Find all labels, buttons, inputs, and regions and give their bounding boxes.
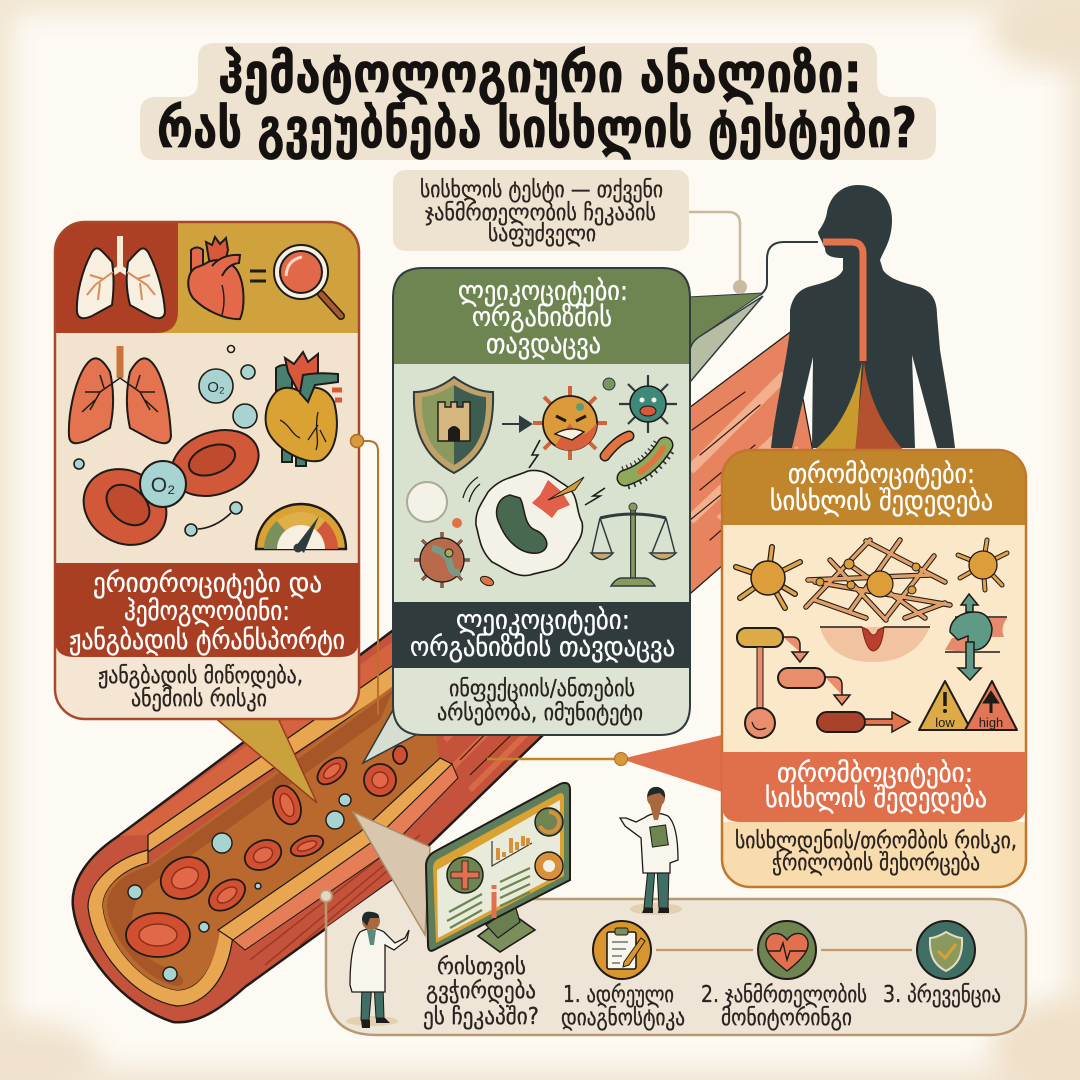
oxygen molecule bbox=[140, 461, 186, 507]
connector: tube line bbox=[760, 242, 818, 295]
panel: erythrocytes bbox=[55, 222, 364, 719]
leukocytes heading: ლეიკოციტები: bbox=[458, 276, 628, 307]
icon: heart small bbox=[188, 237, 244, 319]
connector: platelets to vessel bbox=[487, 758, 621, 760]
step labels: 2. ჯანმრთელობის bbox=[701, 982, 867, 1008]
dotted link bbox=[198, 513, 231, 529]
icon: anatomical heart bbox=[266, 352, 342, 466]
question text bbox=[423, 954, 539, 1030]
oxygen molecule: O₂ bbox=[151, 474, 175, 497]
platelets heading: სისხლის შედედება bbox=[770, 486, 993, 517]
icon: angry virus bbox=[533, 386, 607, 460]
callout tail: platelets bbox=[621, 735, 722, 792]
icon: rod bacterium bbox=[605, 436, 629, 456]
connector: note to callout bbox=[689, 212, 740, 282]
callout tail: platelets top bbox=[812, 361, 905, 452]
icon: warning triangles: low bbox=[935, 715, 955, 730]
callout tail: leukocytes upper bbox=[688, 293, 763, 382]
icon: green virus bbox=[619, 375, 677, 433]
human silhouette bbox=[771, 185, 955, 448]
icon: warning triangles bbox=[919, 681, 1017, 730]
step labels: 3. პრევენცია bbox=[883, 982, 1001, 1008]
question text: გვჭირდება bbox=[426, 978, 536, 1004]
platelets band: თრომბოციტები: bbox=[777, 758, 973, 789]
leukocytes description: ინფექციის/ანთების bbox=[449, 676, 635, 702]
icon: scales bbox=[591, 503, 676, 586]
icon: check shield bbox=[917, 921, 975, 979]
icon: equals bbox=[250, 271, 266, 281]
icon: fibrin mesh bbox=[806, 540, 950, 620]
connector dot: bottom panel bbox=[320, 890, 332, 902]
leukocytes description bbox=[437, 676, 643, 726]
arrow bbox=[502, 417, 531, 431]
leukocytes heading bbox=[458, 276, 628, 360]
step connectors bbox=[656, 949, 912, 951]
red blood cells bbox=[70, 418, 268, 560]
motion lines bbox=[463, 477, 480, 502]
connector: erythrocytes to vessel bbox=[357, 441, 378, 715]
leukocytes heading: თავდაცვა bbox=[486, 329, 601, 360]
platelets heading bbox=[770, 459, 993, 517]
flow diagram bbox=[737, 628, 910, 738]
icon: platelet left bbox=[736, 547, 800, 608]
small particles bbox=[452, 518, 495, 588]
step labels bbox=[561, 982, 1001, 1031]
connector dot: platelets bbox=[614, 752, 628, 766]
icon: magnifier bbox=[274, 245, 341, 316]
step labels: 1. ადრეული bbox=[563, 982, 674, 1008]
intro note box: სისხლის ტესტი — თქვენი bbox=[420, 177, 663, 203]
small particle bbox=[603, 378, 615, 390]
panel: platelets bbox=[722, 450, 1026, 887]
vessel: upper cut wall bbox=[120, 640, 395, 836]
icon: heart pulse bbox=[758, 921, 816, 979]
icon: flagellated bacterium bbox=[625, 445, 665, 478]
step labels: მონიტორინგი bbox=[721, 1005, 852, 1031]
platelets description: სისხლდენის/თრომბის რისკი, bbox=[735, 828, 1017, 854]
icon: warning triangles: high bbox=[979, 715, 1003, 730]
vessel: oxygen bubbles bbox=[128, 794, 351, 981]
leukocytes band bbox=[410, 605, 675, 663]
blood vessel bbox=[73, 320, 830, 1022]
icon: wound bbox=[820, 627, 930, 662]
platelets band bbox=[765, 758, 987, 814]
panel: leukocytes bbox=[393, 268, 690, 735]
erythrocytes description bbox=[98, 663, 303, 712]
question text: რისთვის bbox=[437, 954, 526, 980]
vessel: red blood cells bbox=[126, 746, 407, 957]
icon: monitor bbox=[426, 783, 570, 952]
icon: gauge bbox=[256, 504, 346, 553]
question text: ეს ჩეკაპში? bbox=[423, 1004, 539, 1030]
step labels: დიაგნოსტიკა bbox=[561, 1005, 685, 1031]
platelets band: სისხლის შედედება bbox=[765, 783, 987, 814]
vessel: lumen bbox=[103, 686, 440, 990]
silhouette: trachea bbox=[823, 242, 863, 361]
icon: shield with tower bbox=[414, 377, 493, 473]
intro note box: საფუძველი bbox=[488, 221, 596, 247]
intro note box: ჯანმრთელობის ჩეკაპის bbox=[425, 200, 656, 226]
title: ჰემატოლოგიური ანალიზი: bbox=[218, 41, 862, 105]
leukocytes band: ლეიკოციტები: bbox=[456, 605, 630, 636]
title bbox=[140, 41, 936, 160]
leukocytes heading: ორგანიზმის bbox=[472, 302, 612, 333]
erythrocytes band bbox=[55, 563, 359, 657]
erythrocytes description: ანემიის რისკი bbox=[131, 686, 267, 712]
doctor left bbox=[346, 912, 409, 1028]
erythrocytes band: ჟანგბადის ტრანსპორტი bbox=[69, 625, 345, 656]
erythrocytes description: ჟანგბადის მიწოდება, bbox=[98, 663, 303, 689]
oxygen bubbles bbox=[74, 346, 257, 536]
platelets description bbox=[735, 828, 1017, 876]
monitor: donut bbox=[535, 808, 563, 880]
monitor: data lines bbox=[447, 868, 530, 928]
icon: clipboard bbox=[593, 921, 651, 979]
erythrocytes band: ერითროციტები და bbox=[93, 568, 322, 599]
icon: platelet right bbox=[958, 540, 1007, 590]
erythrocytes band: ჰემოგლობინი: bbox=[124, 596, 290, 627]
intro note box bbox=[393, 170, 689, 251]
icon: lymphocyte bbox=[407, 482, 447, 522]
connector dot bbox=[733, 280, 747, 294]
callout tail: monitor bbox=[353, 812, 430, 935]
platelets heading: თრომბოციტები: bbox=[788, 459, 975, 490]
leukocytes band: ორგანიზმის თავდაცვა bbox=[410, 632, 675, 663]
vessel: lower cut wall bbox=[218, 758, 452, 940]
icon: macrophage bbox=[476, 470, 584, 576]
label: O2 small: O₂ bbox=[207, 379, 225, 396]
connector dot: erythrocytes bbox=[350, 434, 364, 448]
leukocytes description: არსებობა, იმუნიტეტი bbox=[437, 700, 643, 726]
icon: vessel repair bbox=[945, 594, 1007, 680]
platelets description: ჭრილობის შეხორცება bbox=[772, 850, 980, 876]
lightning bolts bbox=[529, 440, 605, 505]
panel: bottom why checkup bbox=[320, 783, 1026, 1035]
callout tail: leukocytes lower bbox=[363, 710, 425, 763]
doctor right bbox=[620, 787, 682, 915]
monitor: medical cross bbox=[447, 857, 483, 893]
monitor: bar chart bbox=[492, 836, 532, 866]
callout tail: erythrocytes bbox=[213, 716, 317, 803]
icon: spiky virus bbox=[414, 532, 470, 588]
vessel: rim ring bbox=[88, 850, 233, 1006]
monitor: info mark bbox=[492, 885, 496, 920]
icon: lungs coral bbox=[69, 346, 171, 443]
icon: lungs cream bbox=[77, 236, 165, 318]
